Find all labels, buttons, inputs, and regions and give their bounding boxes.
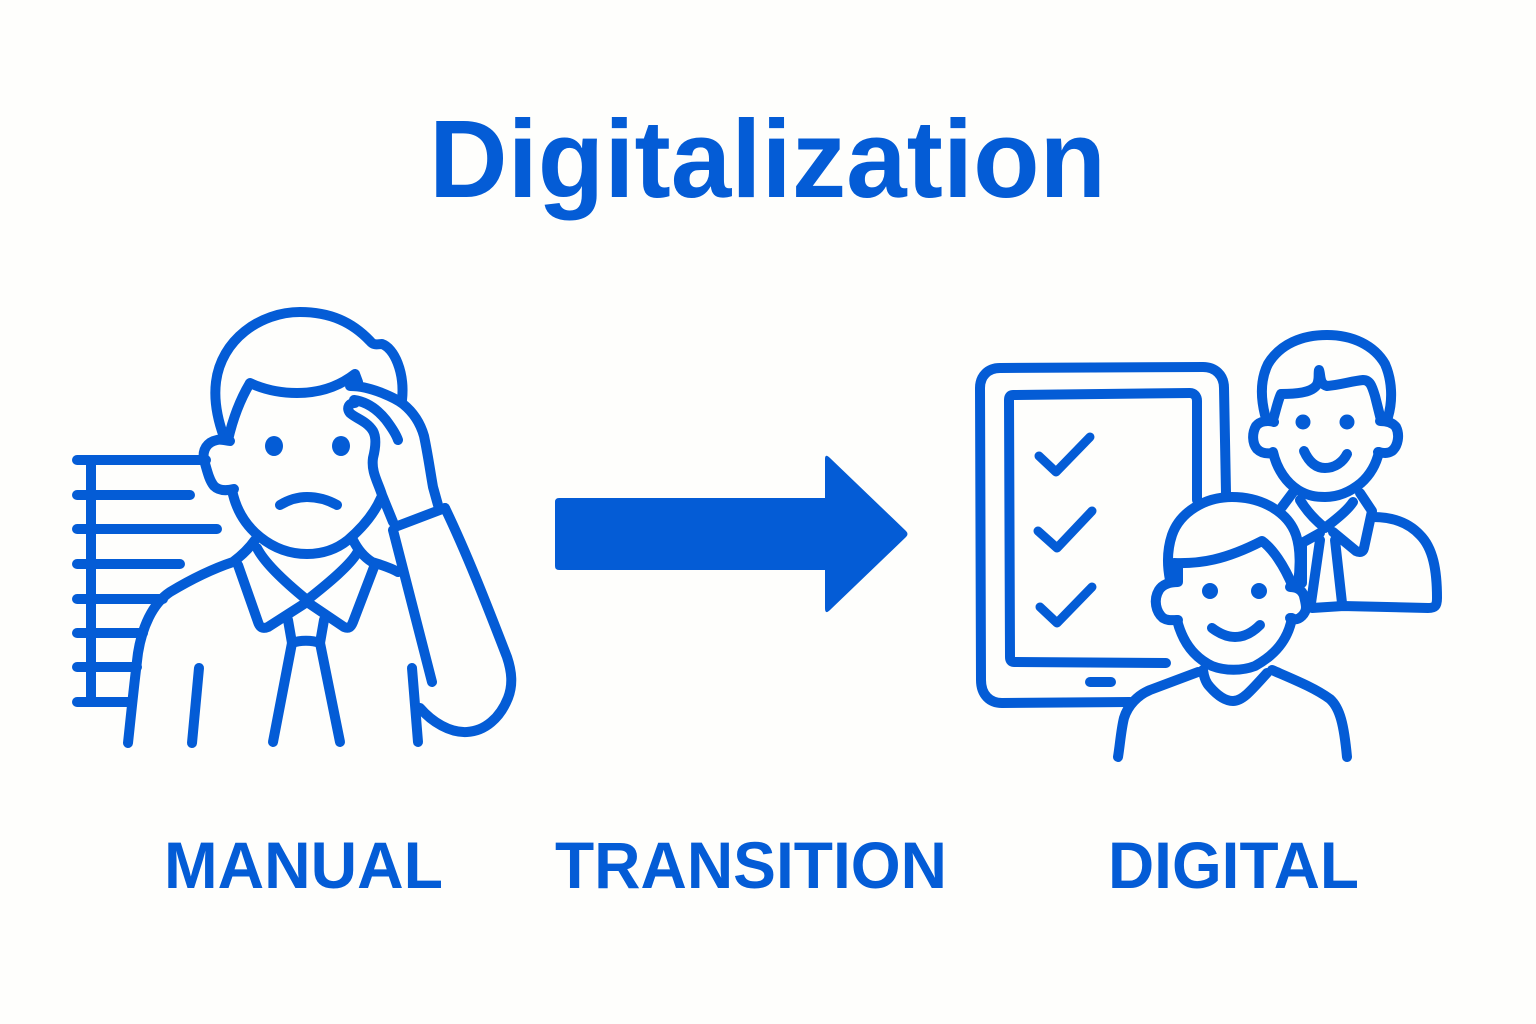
icon: check marks	[1038, 437, 1092, 623]
arrow	[555, 456, 908, 612]
icon: tablet	[980, 367, 1226, 703]
icon: tablet with checklist and two people	[980, 335, 1437, 757]
label: manual: MANUAL	[164, 828, 443, 902]
icon: front person	[1118, 497, 1347, 757]
icon: back person	[1253, 335, 1437, 608]
title: Digitalization	[429, 98, 1106, 221]
label: digital: DIGITAL	[1108, 828, 1359, 902]
icon: worried man	[128, 312, 511, 743]
icon: paper stack	[77, 460, 217, 702]
icon: manual worker with paper stack	[77, 312, 511, 743]
label: transition: TRANSITION	[555, 828, 947, 902]
